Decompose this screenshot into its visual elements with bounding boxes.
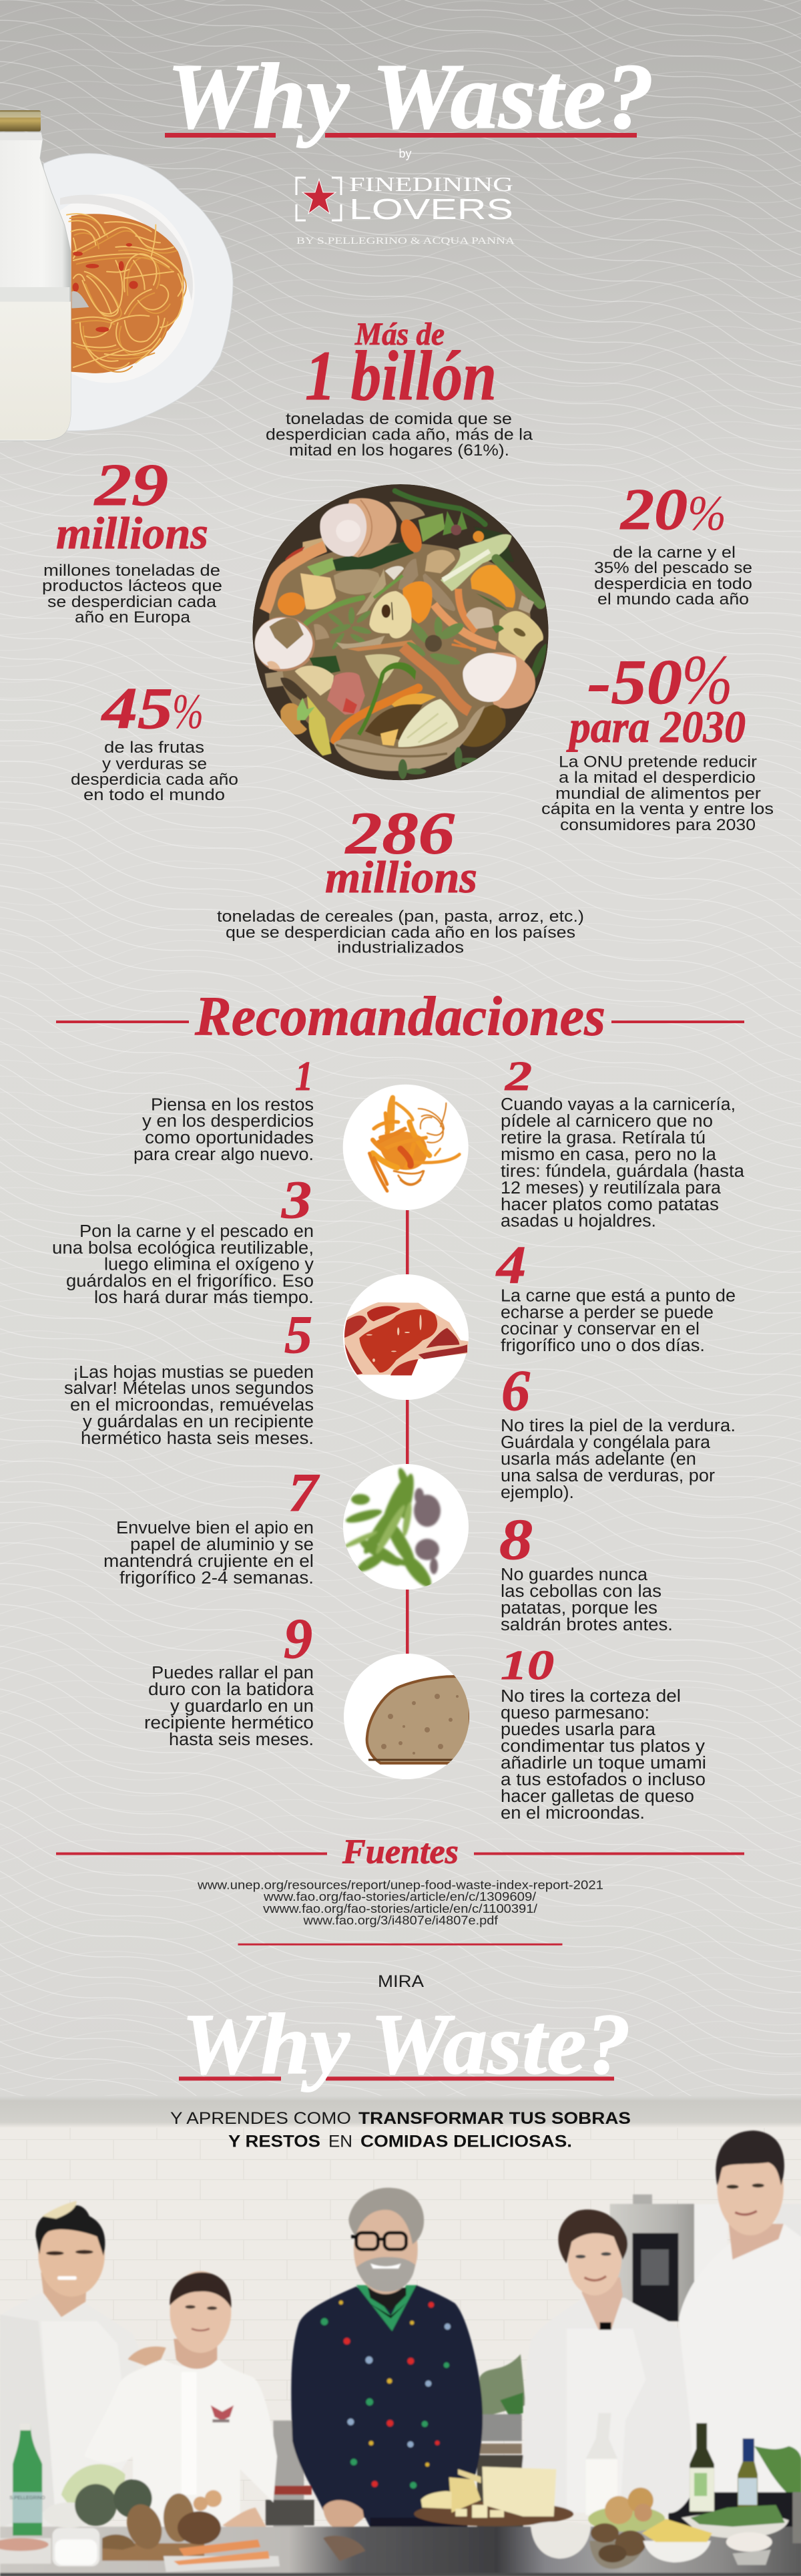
stat: 45%: desperdicia cada año	[71, 771, 238, 789]
tip 6: 6	[501, 1358, 530, 1423]
tip 3: Pon la carne y el pescado en	[79, 1222, 314, 1241]
lettuce	[441, 534, 512, 591]
tip 5: en el microondas, remuévelas	[70, 1396, 314, 1415]
icon: plate of spaghetti	[23, 154, 233, 431]
tip 6: Guárdala y congélala para	[501, 1433, 711, 1452]
stat: 20%: 35% del pescado se	[594, 559, 752, 577]
text: MIRA: MIRA	[378, 1972, 424, 1991]
tip 5: hermético hasta seis meses.	[81, 1429, 314, 1448]
carrot strip	[403, 647, 469, 711]
stat: 45%: %	[172, 685, 204, 739]
closing text	[170, 2109, 631, 2151]
tip 10: a tus estofados o incluso	[501, 1771, 706, 1789]
stat: 1 billón	[266, 317, 533, 459]
strawberry top	[405, 616, 466, 667]
tip 10: añadirle un toque umami	[501, 1754, 706, 1773]
closing text: Y RESTOS	[228, 2132, 320, 2151]
stat: -50% para 2030: consumidores para 2030	[560, 816, 756, 834]
stat: 20%: desperdicia en todo	[594, 575, 752, 593]
tip 8: las cebollas con las	[501, 1582, 661, 1601]
person 1	[0, 2201, 140, 2528]
icon: carrot peels	[343, 1085, 469, 1210]
icon: bread	[344, 1654, 470, 1779]
logo: Fine Dining Lovers: FINEDINING	[349, 172, 513, 196]
source links: vwww.fao.org/fao-stories/article/en/c/1100391/	[263, 1901, 538, 1915]
stat: 1 billón: toneladas de comida que se	[286, 410, 512, 428]
left peel	[265, 546, 325, 611]
stat: 45%: en todo el mundo	[83, 786, 225, 804]
closing text: TRANSFORMAR TUS SOBRAS	[358, 2109, 631, 2128]
tip 3	[52, 1171, 314, 1307]
tip 9: y guardarlo en un	[170, 1697, 314, 1716]
tip 8: No guardes nunca	[501, 1566, 648, 1584]
spaghetti	[67, 214, 186, 373]
tip 4: La carne que está a punto de	[501, 1287, 736, 1306]
stat: -50% para 2030: mundial de alimentos per	[555, 785, 761, 803]
stat: 29 millions: millions	[56, 508, 208, 558]
stat: 29 millions: productos lácteos que	[42, 577, 222, 595]
tip 2	[501, 1054, 745, 1230]
tip 7: papel de aluminio y se	[130, 1535, 314, 1554]
logo: Fine Dining Lovers: LOVERS	[349, 193, 513, 226]
tip 5: y guárdalas en un recipiente	[83, 1413, 314, 1431]
tip 7: 7	[288, 1462, 320, 1523]
stove	[273, 2420, 304, 2528]
stat: -50% para 2030: %	[682, 640, 733, 719]
photo: chefs in the kitchen	[0, 2096, 801, 2576]
stat: 29 millions: se desperdician cada	[47, 593, 216, 611]
left food items: S.PELLEGRINO	[9, 2495, 45, 2501]
tip 1: y en los desperdicios	[142, 1112, 314, 1131]
tip 1: como oportunidades	[145, 1129, 314, 1147]
carrot slice	[400, 519, 422, 553]
tip 6	[501, 1358, 736, 1502]
tip 9	[144, 1606, 314, 1749]
stat: -50% para 2030: para 2030	[566, 701, 746, 752]
text: by: by	[398, 147, 412, 160]
herbs	[326, 607, 372, 651]
stat: 45%: y verduras se	[102, 755, 207, 773]
green pod	[496, 559, 541, 604]
tip 9: hasta seis meses.	[169, 1730, 314, 1749]
mid	[365, 654, 400, 683]
tip 2: pídele al carnicero que no	[501, 1112, 713, 1131]
person 5	[669, 2131, 801, 2531]
stat: 29 millions: año en Europa	[75, 608, 190, 626]
tip 3: luego elimina el oxígeno y	[104, 1256, 314, 1274]
tip 8: 8	[499, 1507, 533, 1572]
tip 6: una salsa de verduras, por	[501, 1467, 716, 1485]
apple centre	[369, 591, 412, 638]
stat: 286 millions: toneladas de cereales (pan, pasta, arroz, etc.)	[217, 908, 584, 926]
stat: 1 billón: Más de	[354, 317, 445, 352]
stat: 1 billón: 1 billón	[305, 337, 497, 415]
onion and banana	[392, 693, 436, 713]
timeline connectors	[406, 1210, 409, 1654]
stat: 29 millions: millones toneladas de	[43, 562, 220, 580]
heading: Fuentes: Fuentes	[342, 1833, 459, 1871]
tip 2: tires: fúndela, guárdala (hasta	[501, 1162, 745, 1181]
tip 10	[501, 1643, 706, 1823]
source links: www.fao.org/3/i4807e/i4807e.pdf	[302, 1913, 499, 1927]
tip 2: asadas u hojaldres.	[501, 1212, 656, 1230]
stat: 20%	[594, 478, 752, 608]
image: bowl of food scraps	[252, 484, 549, 780]
stat: 20%: el mundo cada año	[597, 590, 749, 608]
left egg	[255, 616, 315, 671]
icon: milk bottle	[0, 110, 71, 441]
stat: 1 billón: mitad en los hogares (61%).	[289, 441, 509, 459]
oven	[477, 2195, 801, 2529]
logo: Fine Dining Lovers: BY S.PELLEGRINO & ACQUA PANNA	[296, 236, 515, 246]
stat: -50% para 2030	[541, 640, 774, 834]
tip 2: Cuando vayas a la carnicería,	[501, 1095, 736, 1114]
tip 2: retire la grasa. Retírala tú	[501, 1129, 706, 1147]
tip 3: 3	[281, 1171, 312, 1230]
stat: -50% para 2030: La ONU pretende reducir	[559, 753, 757, 771]
stat: 1 billón: desperdician cada año, más de la	[266, 426, 533, 443]
tip 2: 2	[505, 1054, 532, 1099]
left food items	[0, 2424, 280, 2572]
tip 5: 5	[284, 1306, 312, 1364]
counter	[0, 2527, 801, 2576]
stat: 45%: 45	[101, 677, 173, 741]
icon: steak	[342, 1274, 469, 1400]
tip 7	[103, 1462, 320, 1588]
person 3	[291, 2188, 483, 2532]
source links	[197, 1877, 603, 1927]
tip 3: guárdalos en el frigorífico. Eso	[66, 1272, 314, 1290]
tip 4: echarse a perder se puede	[501, 1304, 714, 1322]
tip 5	[64, 1306, 314, 1448]
tip 7: mantendrá crujiente en el	[103, 1552, 314, 1571]
tip 9: duro con la batidora	[148, 1680, 314, 1699]
tip 5: salvar! Mételas unos segundos	[64, 1379, 314, 1398]
title: Why Waste?: Why Waste?	[167, 45, 654, 148]
bean top	[395, 491, 485, 524]
source links: www.fao.org/fao-stories/article/en/c/1309609/	[263, 1889, 537, 1903]
tip 8	[499, 1507, 673, 1634]
orange peel bottom	[335, 688, 419, 740]
stat: 20%: %	[688, 486, 726, 541]
stat: 286 millions: industrializados	[337, 939, 464, 956]
person 4	[521, 2209, 693, 2513]
tip 5: ¡Las hojas mustias se pueden	[73, 1363, 314, 1382]
tip 9: recipiente hermético	[144, 1714, 314, 1732]
tip 6: usarla más adelante (en	[501, 1450, 696, 1469]
tip 9: Puedes rallar el pan	[152, 1664, 314, 1682]
icon: wilted greens	[342, 1464, 469, 1591]
tip 9: 9	[284, 1606, 312, 1670]
tip 10: 10	[501, 1643, 554, 1688]
closing text: Y APRENDES COMO	[170, 2109, 351, 2128]
tip 8: saldrán brotes antes.	[501, 1616, 673, 1634]
person 2	[84, 2271, 277, 2536]
stat: 20%: de la carne y el	[613, 544, 736, 562]
tip 2: hacer platos como patatas	[501, 1195, 719, 1214]
mid right brown	[425, 550, 455, 573]
closing text: EN	[328, 2132, 352, 2151]
tip 10: hacer galletas de queso	[501, 1787, 694, 1806]
tip 2: mismo en casa, pero no la	[501, 1145, 717, 1164]
apple right	[499, 611, 543, 663]
heading: Recomandaciones: Recomandaciones	[194, 986, 605, 1047]
tip 1: 1	[295, 1054, 313, 1099]
stat: 45%: de las frutas	[104, 739, 204, 757]
lower left	[265, 671, 285, 688]
tip 4: cocinar y conservar en el	[501, 1320, 700, 1338]
tip 7: frigorífico 2-4 semanas.	[119, 1569, 314, 1588]
stat: -50% para 2030: a la mitad el desperdicio	[559, 769, 756, 787]
tip 2: 12 meses) y reutilízala para	[501, 1179, 722, 1198]
tip 4	[495, 1236, 736, 1355]
stat: 286 millions	[217, 800, 584, 956]
heading: Fuentes	[56, 1833, 744, 1871]
tip 6: No tires la piel de la verdura.	[501, 1417, 736, 1435]
tip 10: No tires la corteza del	[501, 1687, 681, 1706]
closing text: COMIDAS DELICIOSAS.	[360, 2132, 572, 2151]
stat: 29 millions	[42, 452, 222, 626]
egg top	[348, 498, 397, 558]
tip 7: Envuelve bien el apio en	[116, 1519, 314, 1537]
tip 10: en el microondas.	[501, 1804, 645, 1823]
logo: Fine Dining Lovers	[296, 172, 515, 246]
tip 3: los hará durar más tiempo.	[94, 1288, 314, 1307]
tip 1	[134, 1054, 314, 1164]
right food items	[414, 2413, 801, 2569]
tip 1: para crear algo nuevo.	[134, 1145, 314, 1164]
zucchini	[307, 558, 336, 577]
tip 3: una bolsa ecológica reutilizable,	[52, 1239, 314, 1258]
tip 8: patatas, porque les	[501, 1599, 657, 1618]
heading: Recomandaciones	[56, 986, 744, 1047]
source links: www.unep.org/resources/report/unep-food-waste-index-report-2021	[197, 1877, 603, 1891]
tip 1: Piensa en los restos	[151, 1095, 314, 1114]
bottom peel	[347, 640, 416, 651]
closing title: Why Waste?: Why Waste?	[182, 1996, 631, 2092]
stat: 286 millions: 286	[344, 800, 455, 867]
stat: 29 millions: 29	[93, 452, 168, 518]
tip 4: frigorífico uno o dos días.	[501, 1336, 705, 1355]
stat: 286 millions: que se desperdician cada año en los países	[226, 924, 575, 942]
tip 10: queso parmesano:	[501, 1704, 649, 1722]
tip 10: puedes usarla para	[501, 1720, 656, 1739]
tip 6: ejemplo).	[501, 1483, 574, 1502]
stalk	[419, 513, 445, 542]
orange right	[471, 565, 515, 608]
tip 10: condimentar tus platos y	[501, 1737, 705, 1756]
carrot curves	[434, 604, 496, 646]
stat: 45%	[71, 677, 238, 804]
stat: 286 millions: millions	[325, 852, 477, 902]
tip 4: 4	[495, 1236, 526, 1295]
right egg	[491, 652, 536, 709]
orange centre	[403, 581, 432, 623]
stat: -50% para 2030: -50	[587, 647, 682, 717]
stat: -50% para 2030: cápita en la venta y entre los	[541, 800, 774, 818]
stat: 20%: 20	[619, 478, 688, 542]
